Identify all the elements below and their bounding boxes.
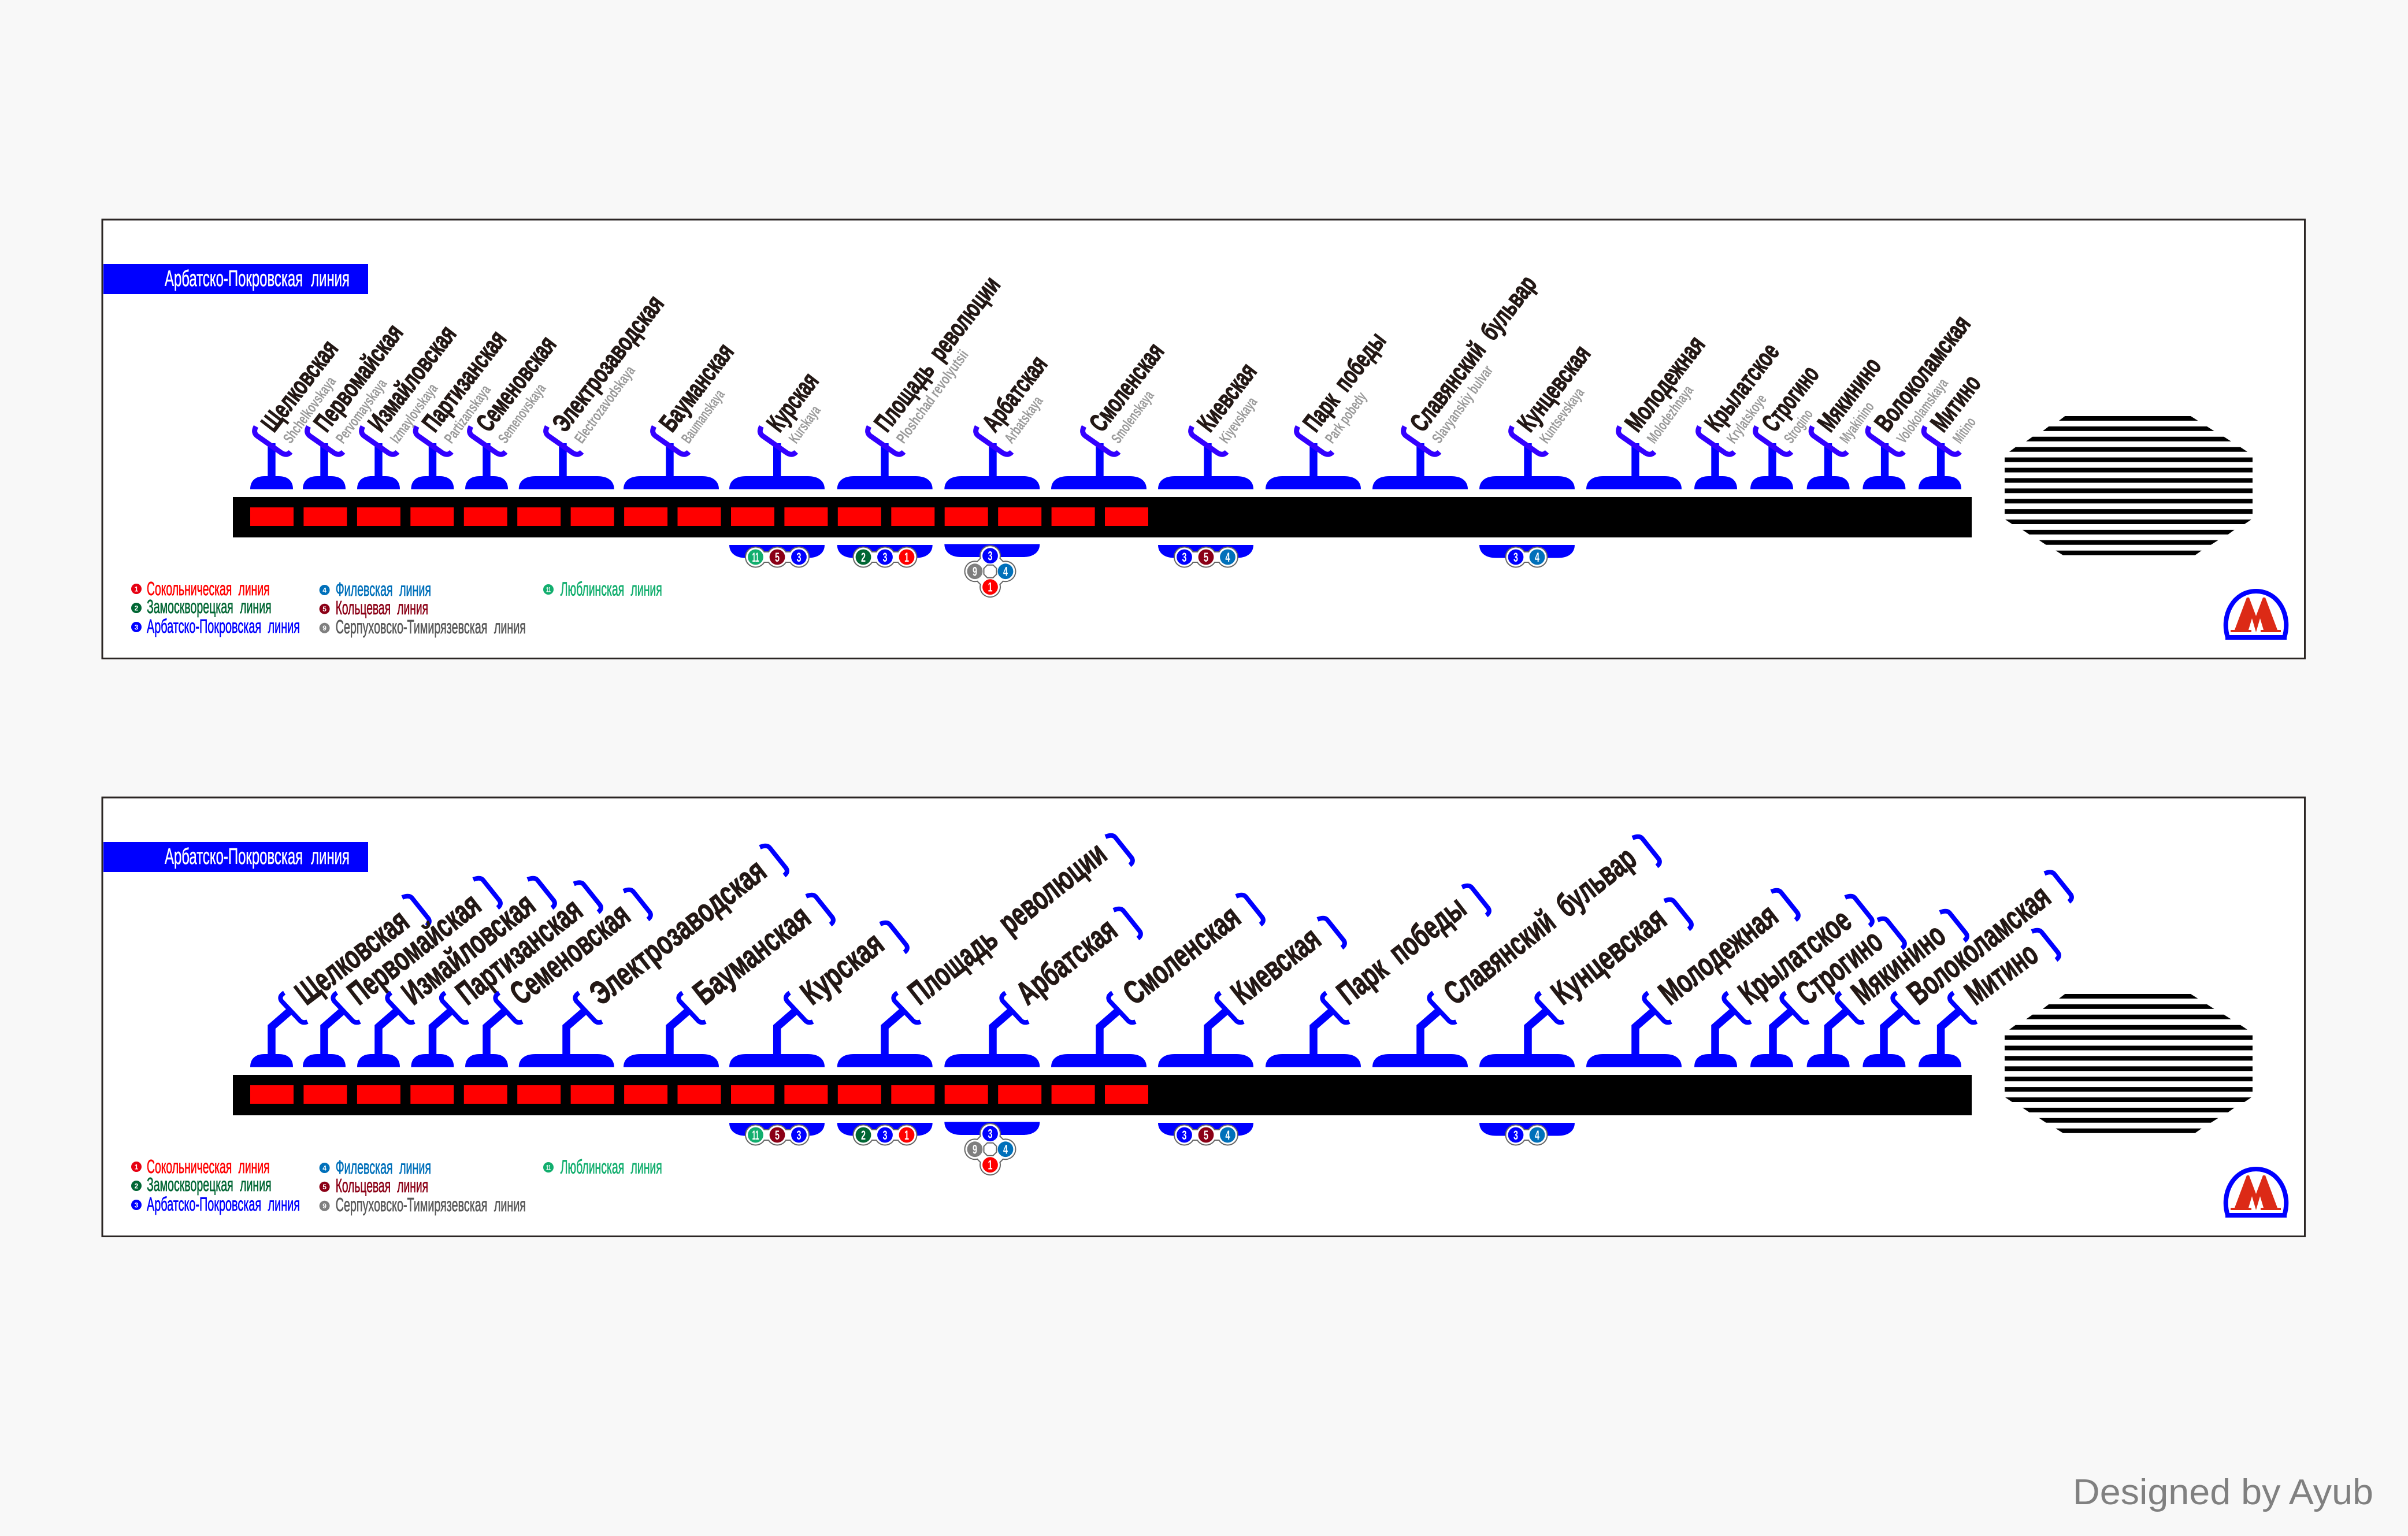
transfer: Киевская: 4 [1225, 550, 1230, 565]
legend: metro lines [131, 1156, 662, 1215]
station: Парк победы: Парк победы [1297, 327, 1392, 437]
transfer: Курская: 5 [775, 1128, 780, 1142]
station: Щелковская: Щелковская [255, 334, 344, 437]
legend: metro lines: 4 [322, 1164, 326, 1172]
station: Парк победы [1266, 886, 1489, 1067]
station: Славянский бульвар: Славянский бульвар [1437, 840, 1643, 1012]
station: Семеновская: Семеновская [470, 330, 562, 437]
station: Крылатское [1694, 896, 1872, 1067]
transfer: Площадь революции: 3 [883, 1128, 888, 1142]
station: Измайловская [357, 878, 555, 1067]
legend: metro lines: Сокольническая линия [147, 1156, 270, 1177]
station: Славянский бульвар [1372, 270, 1542, 489]
station: Электрозаводская [519, 290, 670, 489]
station: Бауманская: Baumanskaya [678, 386, 728, 447]
legend: metro lines: Филевская линия [336, 578, 431, 600]
transfer: Курская: 3 [796, 550, 801, 565]
station: Площадь революции: Площадь революции [869, 270, 1006, 437]
transfer: Курская [729, 545, 825, 567]
transfer: Площадь революции: 2 [861, 1128, 866, 1142]
track bar with red train cars [233, 497, 1972, 537]
station: Бауманская: Бауманская [687, 898, 818, 1012]
station: Киевская [1158, 918, 1345, 1067]
station: Кунцевская: Кунцевская [1545, 900, 1674, 1012]
station: Кунцевская [1479, 339, 1596, 489]
station: Кунцевская [1479, 900, 1691, 1067]
icon: metro logo [2225, 1169, 2287, 1218]
station: Электрозаводская [519, 846, 787, 1067]
station: Курская: Курская [794, 925, 891, 1012]
station: Крылатское: Крылатское [1699, 337, 1785, 437]
station: Молодежная [1586, 891, 1798, 1067]
transfer: Киевская [1158, 545, 1253, 567]
transfer: Курская [729, 1123, 825, 1145]
station: Арбатская: Арбатская [977, 350, 1053, 437]
transfer: Площадь революции [837, 545, 933, 567]
station: Славянский бульвар: Славянский бульвар [1404, 270, 1542, 437]
transfer: Киевская: 3 [1182, 550, 1187, 565]
legend: metro lines: 1 [135, 1163, 139, 1171]
station: Измайловская: Измайловская [395, 886, 542, 1012]
transfer: Арбатская: 4 [1003, 565, 1008, 579]
legend: metro lines: 9 [322, 624, 326, 632]
station: Парк победы [1266, 327, 1392, 489]
station: Семеновская [465, 330, 562, 489]
station: Строгино [1750, 360, 1825, 489]
track bar with red train cars [233, 1075, 1972, 1115]
station: Киевская: Kiyevskaya [1216, 394, 1261, 447]
legend: metro lines: 3 [135, 623, 139, 631]
legend: metro lines: Люблинская линия [561, 1156, 662, 1178]
station: Первомайская: Первомайская [341, 886, 488, 1012]
panel: lower diagram, bracketed station names [102, 797, 2305, 1237]
transfer: Площадь революции: 3 [883, 550, 888, 565]
transfer: Курская: 11 [752, 1128, 759, 1142]
heading: line name [103, 842, 368, 872]
transfer: Арбатская: 9 [973, 565, 977, 579]
legend: metro lines: Кольцевая линия [336, 597, 428, 618]
credit text: Designed by Ayub [2073, 1472, 2373, 1512]
station: Смоленская: Smolenskaya [1108, 387, 1157, 447]
station: Первомайская: Первомайская [308, 318, 409, 437]
station: Смоленская [1051, 895, 1263, 1067]
station: Семеновская [465, 890, 651, 1067]
station: Мякинино: Мякинино [1812, 352, 1887, 437]
station: Мякинино [1807, 352, 1887, 489]
station: Строгино: Строгино [1790, 922, 1890, 1012]
station: Бауманская [624, 895, 833, 1067]
legend: metro lines: Серпуховско-Тимирязевская линия [336, 616, 526, 637]
station: Площадь революции [837, 270, 1006, 489]
station: Щелковская: Shchelkovskaya [280, 373, 339, 447]
station: Курская [729, 367, 825, 489]
station: Волоколамская: Volokolamskaya [1893, 375, 1951, 447]
station: Славянский бульвар: Slavyanskiy bulvar [1429, 362, 1496, 447]
station: Славянский бульвар [1372, 837, 1660, 1067]
station: Курская: Курская [761, 367, 824, 437]
station: Партизанская: Partizanskaya [440, 381, 494, 447]
station: Молодежная [1586, 330, 1711, 489]
station: Молодежная: Молодежная [1619, 330, 1711, 437]
station: Семеновская: Семеновская [503, 896, 637, 1012]
legend: metro lines: 11 [546, 1164, 551, 1172]
heading: line name [103, 264, 368, 294]
station: Крылатское: Крылатское [1732, 901, 1858, 1012]
station: Кунцевская: Кунцевская [1512, 339, 1596, 437]
legend: metro lines: Филевская линия [336, 1156, 431, 1178]
station: Строгино: Strogino [1780, 406, 1816, 447]
station: Первомайская: Pervomayskaya [332, 375, 390, 447]
legend: metro lines: 5 [322, 605, 326, 613]
legend: metro lines: 9 [322, 1202, 326, 1210]
station: Арбатская [944, 350, 1053, 489]
station: Измайловская: Izmaylovskaya [387, 380, 441, 447]
legend: metro lines: Замоскворецкая линия [147, 596, 272, 617]
striped octagon [2005, 416, 2253, 555]
station: Партизанская [411, 325, 512, 489]
icon: metro logo [2225, 591, 2287, 640]
station: Строгино: Строгино [1756, 360, 1825, 437]
station: Семеновская: Semenovskaya [495, 380, 550, 447]
legend: metro lines: 3 [135, 1201, 139, 1209]
transfer: Киевская: 3 [1182, 1128, 1187, 1142]
station: Митино: Митино [1925, 369, 1986, 437]
legend: metro lines: 2 [135, 604, 139, 613]
transfer: Кунцевская: 4 [1535, 550, 1539, 565]
station: Площадь революции: Площадь революции [901, 835, 1114, 1012]
transfer: Курская: 11 [752, 550, 759, 565]
legend: metro lines: Замоскворецкая линия [147, 1174, 272, 1195]
station: Парк победы: Парк победы [1330, 889, 1473, 1012]
station: Волоколамская: Волоколамская [1901, 878, 2057, 1012]
station: Мякинино: Мякинино [1845, 917, 1953, 1012]
station: Волоколамская [1862, 310, 1976, 489]
legend: metro lines: 5 [322, 1183, 326, 1191]
station: Партизанская: Партизанская [416, 325, 512, 437]
transfer: Киевская [1158, 1123, 1253, 1145]
station: Бауманская: Бауманская [654, 337, 740, 437]
heading: line name: Арбатско-Покровская линия [165, 844, 350, 869]
transfer: Киевская: 4 [1225, 1128, 1230, 1142]
station: Киевская: Киевская [1192, 357, 1262, 437]
heading: line name: Арбатско-Покровская линия [165, 266, 350, 291]
station: Митино [1919, 930, 2059, 1067]
station: Молодежная: Molodezhnaya [1643, 382, 1697, 447]
transfer: Кунцевская: 4 [1535, 1128, 1539, 1142]
legend: metro lines: Арбатско-Покровская линия [147, 615, 300, 637]
station: Киевская: Киевская [1225, 920, 1327, 1012]
transfer: Арбатская [944, 1122, 1040, 1175]
legend: metro lines: 2 [135, 1182, 139, 1190]
station: Партизанская: Партизанская [449, 891, 589, 1012]
transfer: Курская: 3 [796, 1128, 801, 1142]
station: Партизанская [411, 882, 601, 1067]
station: Измайловская: Измайловская [362, 320, 462, 437]
legend: metro lines: 11 [546, 586, 551, 594]
transfer: Арбатская: 3 [988, 549, 993, 563]
transfer: Кунцевская: 3 [1513, 1128, 1518, 1142]
transfer: Киевская: 5 [1204, 1128, 1208, 1142]
station: Кунцевская: Kuntsevskaya [1536, 384, 1587, 447]
station: Площадь революции [837, 835, 1133, 1067]
station: Первомайская [303, 318, 409, 489]
panel frame [102, 220, 2305, 659]
station: Строгино [1750, 919, 1905, 1067]
transfer: Арбатская [944, 544, 1040, 598]
station: Площадь революции: Ploshchad revolyutsii [893, 347, 972, 447]
station: Мякинино: Myakinino [1836, 398, 1878, 447]
station: Смоленская: Смоленская [1116, 898, 1248, 1012]
legend: metro lines: Сокольническая линия [147, 578, 270, 599]
station: Митино [1919, 369, 1986, 489]
station: Киевская [1158, 357, 1262, 489]
station: Измайловская [357, 320, 462, 489]
transfer: Арбатская: 4 [1003, 1142, 1008, 1157]
station: Курская: Kurskaya [785, 402, 824, 447]
transfer: Арбатская: 9 [973, 1142, 977, 1157]
legend: metro lines: Серпуховско-Тимирязевская линия [336, 1194, 526, 1215]
station: Смоленская [1051, 337, 1170, 489]
station: Молодежная: Молодежная [1652, 897, 1785, 1012]
transfer: Курская: 5 [775, 550, 780, 565]
transfer: Арбатская: 1 [988, 580, 993, 595]
station: Щелковская [250, 334, 344, 489]
legend: metro lines: Кольцевая линия [336, 1175, 428, 1196]
station: Волоколамская: Волоколамская [1869, 310, 1976, 437]
station: Мякинино [1807, 911, 1967, 1067]
transfer: Арбатская: 1 [988, 1158, 993, 1173]
station: Арбатская [944, 909, 1141, 1067]
station: Электрозаводская: Электрозаводская [547, 290, 670, 437]
legend: metro lines: Люблинская линия [561, 578, 662, 600]
station: Митино: Митино [1958, 935, 2045, 1012]
transfer: Кунцевская [1479, 1123, 1575, 1145]
transfer: Кунцевская [1479, 545, 1575, 567]
station: Арбатская: Арбатская [1010, 911, 1124, 1012]
station: Митино: Mitino [1949, 414, 1979, 447]
station: Волоколамская [1862, 872, 2072, 1067]
transfer: Кунцевская: 3 [1513, 550, 1518, 565]
transfer: Площадь революции: 1 [904, 550, 909, 565]
legend: metro lines: 1 [135, 585, 139, 593]
station: Смоленская: Смоленская [1084, 337, 1170, 437]
legend: metro lines: Арбатско-Покровская линия [147, 1193, 300, 1215]
transfer: Площадь революции [837, 1123, 933, 1145]
station: Бауманская [624, 337, 740, 489]
station: Щелковская [250, 896, 429, 1067]
station: Крылатское [1694, 337, 1785, 489]
transfer: Площадь революции: 1 [904, 1128, 909, 1142]
striped octagon [2005, 994, 2253, 1133]
legend: metro lines [131, 578, 662, 637]
station: Электрозаводская: Electrozavodskaya [571, 362, 639, 447]
panel: upper diagram, angled station names with English names [102, 220, 2305, 659]
station: Электрозаводская: Электрозаводская [583, 852, 773, 1012]
transfer: Арбатская: 3 [988, 1127, 993, 1141]
station: Первомайская [303, 878, 500, 1067]
panel frame [102, 797, 2305, 1237]
station: Арбатская: Arbatskaya [1001, 392, 1047, 447]
station: Крылатское: Krylatskoye [1723, 391, 1770, 447]
legend: metro lines: 4 [322, 586, 326, 594]
transfer: Площадь революции: 2 [861, 550, 866, 565]
station: Курская [729, 923, 907, 1067]
transfer: Киевская: 5 [1204, 550, 1208, 565]
station: Парк победы: Park pobedy [1322, 388, 1370, 447]
station: Щелковская: Щелковская [288, 902, 416, 1012]
